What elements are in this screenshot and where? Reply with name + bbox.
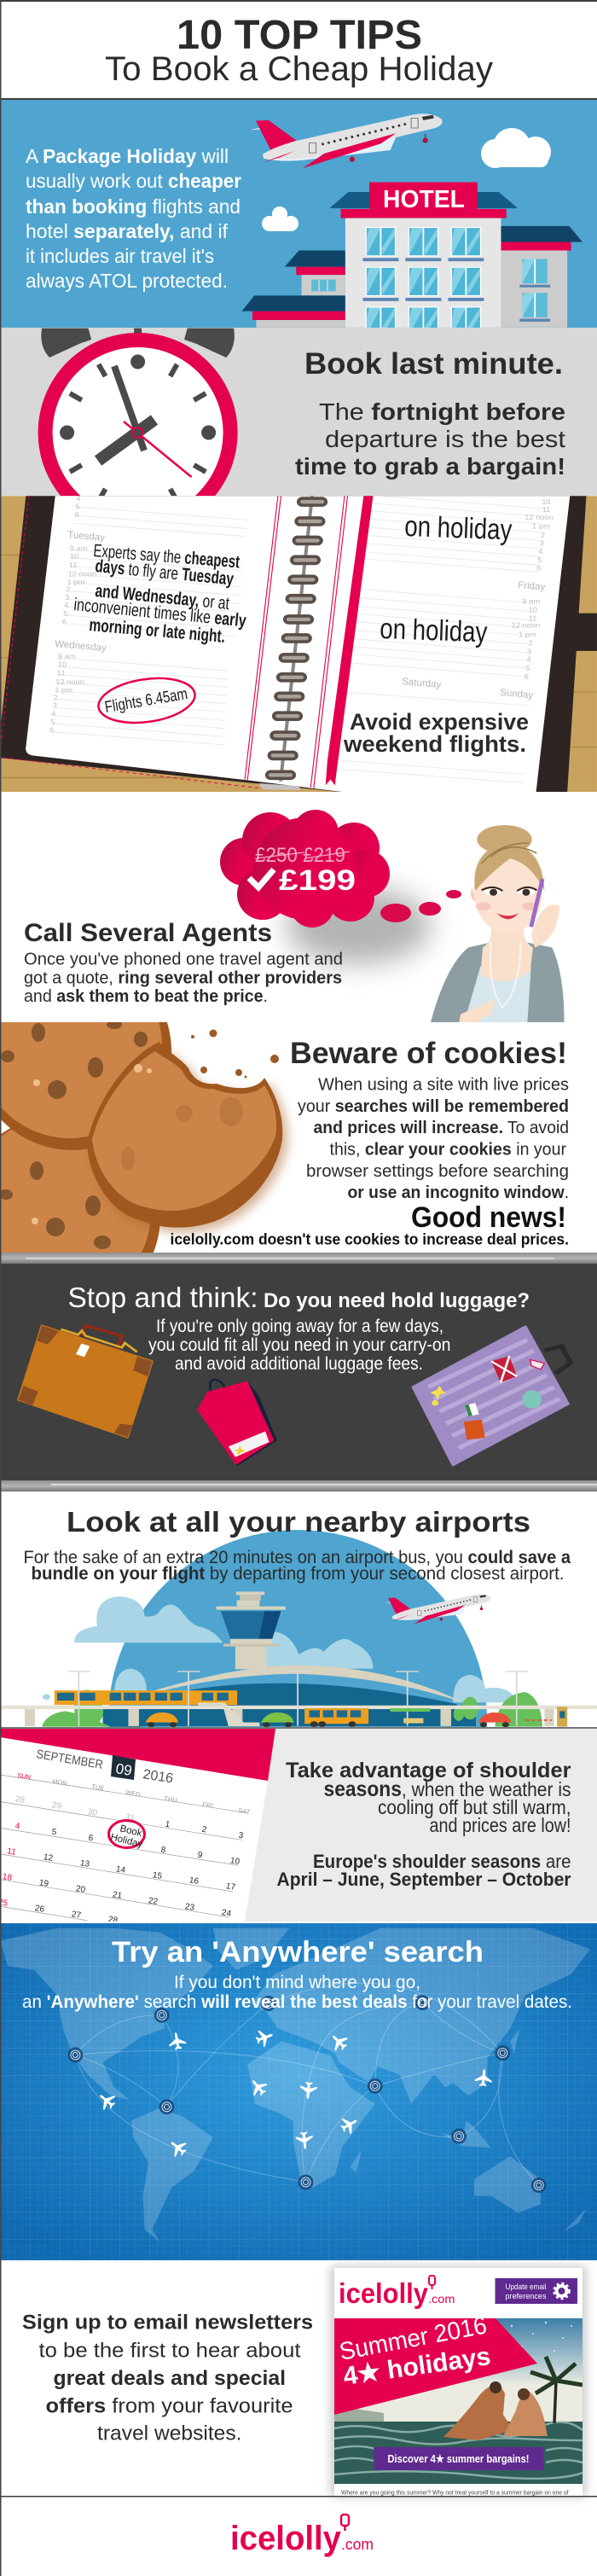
text block: agents: Once you've phoned one travel agent and [24,951,343,969]
weekday row: SUN [17,1771,32,1781]
text block: europe dates: Europe's shoulder seasons are [313,1851,571,1872]
diary time labels: 6 [62,618,67,625]
illustration: cookies [2,1022,295,1253]
panel: diary [0,494,597,792]
handwritten note [73,541,247,647]
diary time labels: 1 pm [532,522,550,530]
calendar: 2016 [142,1767,174,1787]
text block: package holiday: it includes air travel it's [26,245,214,267]
text block: anywhere [22,1973,572,2012]
text block: newsletter: Sign up to email newsletters [22,2311,313,2335]
diary time labels: 1 pm [519,631,536,638]
text block: europe dates: April – June, September – October [276,1869,571,1890]
diary time labels: 6 [536,564,541,572]
note: flights circled: Flights 6.45am [103,685,188,717]
diary time labels: 4 [76,494,81,503]
text block: package holiday: A Package Holiday will [26,145,229,167]
icon: alarm clock [38,328,238,496]
diary illustration [0,494,597,792]
weekday row: MON [52,1777,67,1788]
diary time labels: 10 [542,497,551,506]
new price: £199 [279,864,356,897]
diary time labels: 5 [63,609,67,618]
panel: newsletter [22,2266,586,2497]
date numbers: 12 [43,1852,54,1864]
button: update preferences: preferences [505,2292,547,2301]
text block: agents [24,951,343,1006]
diary time labels: 6 [525,672,529,681]
text: icelolly cookies: icelolly.com doesn't use cookies to increase deal prices. [171,1230,569,1247]
handwritten note: morning or late night. [89,615,226,647]
weekday row: TUE [91,1782,105,1792]
text block: newsletter: offers from your favourite [46,2394,293,2418]
date numbers: 1 [165,1820,171,1829]
date numbers: 13 [79,1858,90,1869]
diary time labels: 3 [540,539,544,547]
date numbers: 8 [160,1846,166,1855]
date numbers: 31 [125,1812,136,1823]
heading: avoid weekend flights [343,709,529,757]
date numbers [0,1794,244,1926]
weekday row: FRI [202,1800,213,1810]
text block: luggage: and avoid additional luggage fees. [175,1354,423,1374]
button: discover [374,2447,544,2470]
text block: newsletter [22,2311,313,2445]
icon: tick [249,869,274,887]
date numbers: 3 [238,1831,244,1840]
text block: anywhere: If you don't mind where you go, [174,1973,420,1992]
heading: avoid weekend flights: weekend flights. [343,731,526,757]
footer logo: icelolly [230,2520,342,2557]
text block: cookies: and prices will increase. To avoid [314,1119,569,1137]
text block: package holiday: usually work out cheaper [26,170,241,192]
diary time labels: 5 [537,556,542,564]
plane icons [95,2026,493,2160]
hotel illustration [241,183,583,336]
heading: anywhere search: Try an 'Anywhere' search [112,1936,484,1968]
icon: backpack [197,1380,277,1467]
icon: small cloud [262,206,298,231]
diary time labels: 4 [526,655,531,664]
date numbers: 21 [112,1890,123,1901]
text block: package holiday: than booking flights and [26,195,241,218]
text block: cookies: or use an incognito window. [348,1183,569,1202]
circled date: book holiday: Holiday [109,1832,144,1850]
text block: package holiday: always ATOL protected. [26,270,228,292]
email preview shadow [331,2266,586,2497]
diary time labels: 2 [529,639,533,647]
email body text: Where are you going this summer? Why not treat yourself to a summer bargain on one of [341,2490,569,2497]
handwritten note: days to fly are Tuesday [95,556,235,590]
text block: fortnight: The fortnight before [319,398,565,425]
illustration: airport scene [0,1591,597,1727]
panel: anywhere search [0,1923,597,2260]
diary time labels: 12 noon [55,678,84,686]
diary time labels: 10 [70,553,78,561]
diary time labels: 2 [541,531,545,539]
text block: fortnight: departure is the best [325,426,565,452]
text block: shoulder seasons [324,1777,571,1836]
panel: package holiday [0,100,597,336]
title: 10 TOP TIPS [177,13,422,58]
date numbers: 24 [221,1908,232,1919]
diary time labels: 6 [74,511,79,519]
icon: plane [249,113,443,168]
heading: nearby airports: Look at all your nearby airports [67,1506,530,1538]
handwritten: on holiday second: on holiday [380,613,488,648]
date numbers: 29 [51,1800,62,1811]
handwritten note: inconvenient times like early [73,595,247,631]
button: update preferences: Update email [505,2282,546,2292]
heading: book last minute: Book last minute. [304,347,563,381]
circled date: book holiday: Book [119,1823,143,1839]
diary time labels: 3 [65,593,69,602]
text block: newsletter: to be the first to hear about [39,2340,301,2362]
airport markers [67,1995,547,2193]
subtitle: To Book a Cheap Holiday [105,50,493,88]
day labels: Friday [518,580,546,593]
date numbers: 16 [188,1875,200,1887]
diary time labels: 9 am [522,597,540,605]
speech cloud [220,810,390,927]
handwritten: on holiday: on holiday [404,510,513,546]
text block: shoulder seasons: seasons, when the weather is [324,1777,571,1801]
diary time labels: 11 [69,561,78,569]
diary time labels: 10 [58,660,67,668]
diary time labels: 3 [527,648,531,655]
heading: do you need hold luggage: Do you need hold luggage? [264,1289,530,1312]
email photo [334,2318,583,2484]
date numbers: 15 [152,1870,163,1881]
date numbers: 2 [201,1825,207,1835]
diary time labels: 12 noon [525,513,554,521]
diary time labels: 10 [529,606,537,613]
hotel sign text: HOTEL [383,186,465,213]
diary time labels: 12 noon [67,570,96,578]
diary time labels: 5 [50,718,55,726]
day labels: Tuesday [67,530,106,544]
day labels: Saturday [402,677,442,690]
diary time labels [49,494,554,734]
panel: nearby airports [2,1511,597,1727]
heading: call several agents: Call Several Agents [24,919,272,947]
date numbers: 28 [14,1794,26,1806]
diary time labels: 4 [64,602,68,609]
date numbers: 17 [225,1881,236,1893]
date numbers: 4 [14,1822,20,1831]
diary time labels: 1 pm [67,578,84,586]
date box: 09 [114,1760,133,1779]
heading: avoid weekend flights: Avoid expensive [350,709,529,735]
date box [111,1755,136,1780]
email preview [334,2268,583,2497]
handwritten note: and Wednesday, or at [95,581,230,613]
date numbers: 22 [148,1896,159,1907]
logo: email: .com [428,2292,455,2306]
cloud shadow [286,887,431,964]
note: flights circled [97,677,196,724]
footer logo: .com [341,2536,374,2553]
date numbers: 30 [87,1807,98,1818]
diary time labels: 11 [542,506,550,514]
illustration: airport dome [2,1530,597,1727]
date numbers: 23 [184,1902,195,1913]
date numbers: 28 [107,1915,119,1926]
text block: fortnight: time to grab a bargain! [295,453,565,480]
date numbers: 10 [229,1856,241,1867]
text block: agents: got a quote, ring several other providers [24,969,342,988]
diary time labels: 2 [53,694,58,701]
icon: small plane [385,1594,490,1624]
panel: header [0,0,597,100]
panel: call several agents [24,810,565,1024]
text block: agents: and ask them to beat the price. [24,987,268,1006]
illustration: woman on phone [430,825,565,1024]
heading: stop and think: Stop and think: [68,1282,258,1313]
diary time labels: 4 [51,710,56,718]
day labels: Sunday [500,688,534,701]
date numbers: 9 [197,1851,203,1860]
circled date: book holiday [109,1821,145,1850]
text block: cookies: When using a site with live prices [318,1075,569,1094]
date numbers: 26 [34,1904,45,1915]
text block: newsletter: great deals and special [53,2367,286,2390]
text block: airports: For the sake of an extra 20 minutes on an airport bus, you could save a [24,1548,571,1567]
button: discover: Discover 4★ summer bargains! [387,2452,529,2465]
diary time labels: 5 [75,503,80,510]
date numbers: 18 [2,1872,13,1883]
text block: newsletter: travel websites. [97,2422,242,2445]
old prices: £250 £219 [255,844,345,867]
icon: large cloud [481,128,551,168]
diary time labels: 5 [525,664,530,672]
diary time labels: 9 am [58,653,76,660]
icon: orange suitcase [18,1326,153,1438]
text block: airports [24,1548,571,1584]
world map [0,1928,590,2242]
date numbers: 5 [51,1828,57,1837]
panel: shoulder seasons [0,1729,597,1926]
diary time labels: 2 [66,585,70,594]
diary time labels: 6 [49,726,54,734]
text block: luggage: you could fit all you need in your carry-on [148,1335,450,1355]
flight routes [75,1983,539,2185]
text block: airports: bundle on your flight by departing from your second closest airport. [31,1564,565,1584]
text block: luggage [148,1317,450,1374]
diary time labels: 9 am [70,544,88,552]
date numbers: 27 [71,1910,82,1921]
text block: cookies: browser settings before searching [306,1162,569,1181]
weekday row: THU [164,1794,177,1804]
diary time labels: 11 [529,614,536,622]
calendar [0,1729,275,1926]
date numbers: 11 [6,1846,17,1858]
text block: fortnight [295,398,565,480]
text block: cookies: this, clear your cookies in your [329,1140,566,1159]
text block: package holiday: hotel separately, and if [26,220,229,242]
diary time labels: 1 pm [55,686,72,694]
panel: hold luggage [0,1264,597,1480]
handwritten note: Experts say the cheapest [93,541,241,572]
date numbers: 14 [115,1864,126,1875]
logo: email: icelolly [339,2277,429,2309]
weekday row: WED [125,1788,142,1799]
panel: book last minute [2,328,597,496]
thought dots [380,890,461,922]
text block: shoulder seasons: cooling off but still warm, [378,1796,571,1818]
weekday row: SAT [238,1806,251,1816]
text block: cookies: your searches will be remembered [298,1097,569,1116]
text block: anywhere: an 'Anywhere' search will reveal the best deals for your travel dates. [22,1992,572,2012]
date numbers: 20 [75,1884,86,1895]
button: update preferences [495,2278,577,2304]
text block: luggage: If you're only going away for a few days, [156,1317,443,1336]
diary time labels: 3 [53,701,57,709]
calendar: SEPTEMBER [35,1747,104,1772]
text block: package holiday [26,145,241,292]
diary time labels: 12 noon [512,621,540,629]
heading: beware of cookies: Beware of cookies! [290,1037,567,1070]
date numbers: 6 [88,1834,94,1843]
text block: europe dates [276,1851,571,1890]
day labels: Wednesday [55,639,107,654]
diary time labels: 11 [57,669,66,677]
date numbers: 19 [38,1878,49,1889]
email headline: Summer 2016 [337,2312,489,2366]
heading: good news: Good news! [411,1201,566,1234]
weekday row [17,1771,251,1816]
heading: shoulder seasons: Take advantage of shoulder [286,1759,571,1782]
text block: cookies [298,1075,569,1202]
icon: purple suitcase [413,1327,571,1465]
day labels [55,530,546,701]
panel: beware of cookies [2,1022,568,1253]
diary time labels: 4 [538,548,542,555]
text block: shoulder seasons: and prices are low! [430,1814,571,1836]
email subheadline: 4★ holidays [341,2342,492,2391]
